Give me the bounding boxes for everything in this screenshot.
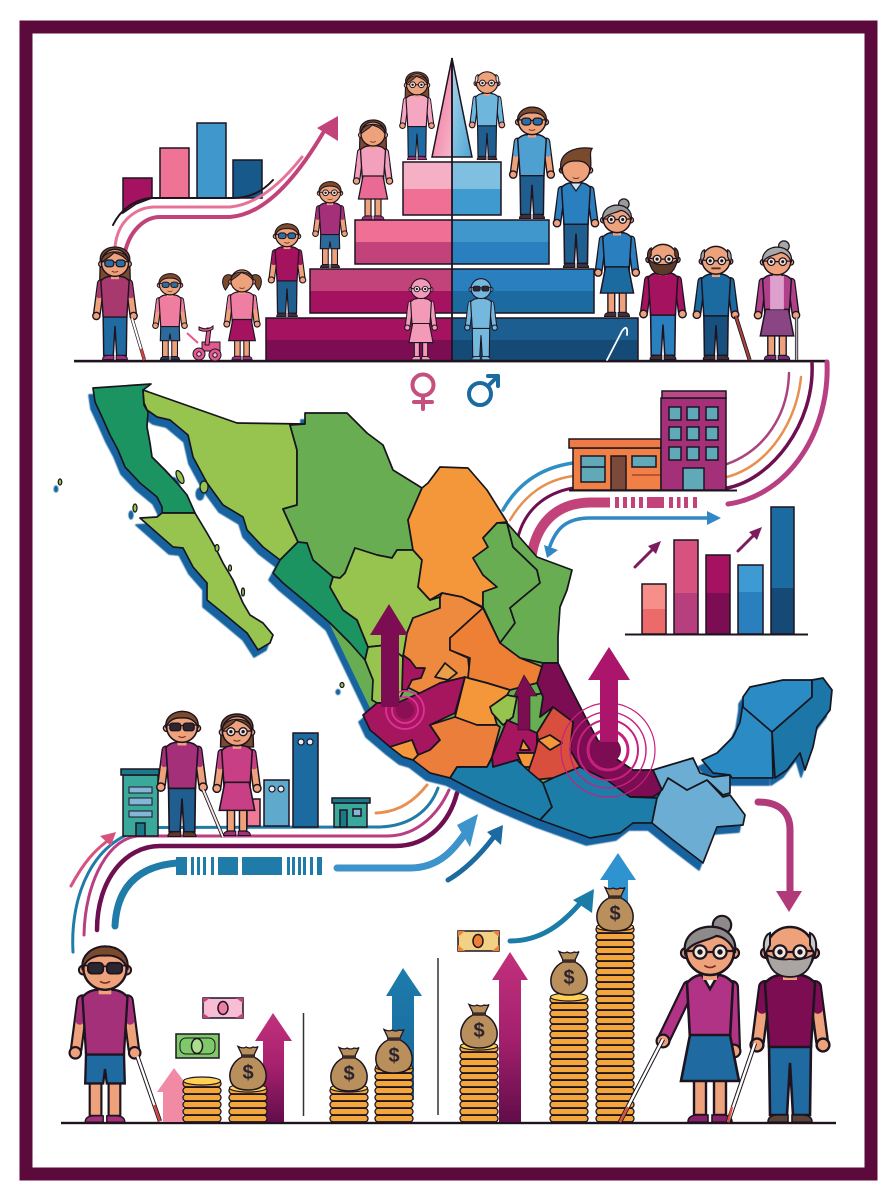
up arrow: blue: [386, 968, 422, 1100]
person: boy on pyramid step: [268, 224, 306, 317]
divider: [437, 958, 439, 1115]
target rings: west: [386, 691, 424, 729]
up arrow: magenta small group: [255, 1013, 292, 1122]
coin stack 3 with money bag: $: [343, 1063, 355, 1085]
state: Guanajuato: [455, 677, 510, 725]
state: Aguascalientes: [435, 663, 457, 680]
up arrow: light pink: [157, 1068, 192, 1122]
state: Morelos: [517, 753, 535, 767]
buildings: lower left skyline: [121, 733, 370, 836]
state: Estado de Mexico: [492, 720, 537, 767]
state: Queretaro: [490, 695, 517, 725]
state: San Luis Potosi: [450, 608, 543, 690]
barcode band: blue: [176, 857, 322, 875]
barcode band: pink: [615, 497, 697, 508]
state: Quintana Roo: [772, 678, 832, 778]
coin stack 7 with money bag: [595, 888, 635, 1122]
coin stack 2 with money bag: [228, 1046, 268, 1122]
coin stack 6 with money bag: $: [563, 967, 575, 989]
state: Hidalgo: [507, 693, 553, 733]
person: woman in pink dress: [213, 714, 261, 836]
person: woman on top step: [400, 72, 434, 160]
state: Campeche: [702, 703, 773, 778]
bar chart: right: [625, 507, 808, 634]
state: Oaxaca: [540, 767, 657, 838]
state: Yucatan: [743, 680, 812, 732]
up arrow: east: [588, 647, 630, 742]
person: boy in shorts: [313, 182, 347, 268]
person: grandfather with cane: [728, 927, 829, 1122]
person: girl with pigtails: [223, 270, 261, 360]
rising curved arrow: [115, 116, 338, 252]
state: Chihuahua: [283, 413, 422, 578]
person: older woman with cane: [754, 241, 800, 360]
map of Mexico: [58, 384, 832, 863]
state: Zacatecas: [403, 593, 483, 697]
person: man in sweater: [553, 148, 599, 268]
coin stack 1: [182, 1077, 222, 1122]
person: man with blue shades: [510, 107, 554, 219]
state: Colima: [390, 740, 418, 760]
up arrow: magenta: [492, 952, 528, 1122]
buildings: school and apartment block: [569, 391, 737, 490]
top baseline: [74, 360, 828, 362]
small pink arrow: [71, 832, 116, 886]
state: Guerrero: [450, 758, 552, 820]
person: boy with cane, large: [70, 946, 160, 1122]
state: Chiapas: [652, 778, 745, 863]
icon: white cane on pyramid: [607, 328, 627, 360]
population pyramid: [266, 58, 638, 361]
down arrow: [758, 802, 802, 912]
blue arrow toward map: [337, 814, 478, 868]
person: woman in pink skirt: [353, 120, 393, 220]
person: boy with glasses: [153, 274, 187, 360]
icon: green banknote: [176, 1034, 219, 1058]
state: Durango: [330, 548, 440, 657]
person: older man with cane: [693, 246, 750, 360]
coin stack 2 with money bag: $: [242, 1062, 254, 1084]
state: Tlaxcala: [538, 735, 562, 750]
icon: male symbol: [469, 376, 498, 405]
state: Jalisco north lobe: [402, 655, 425, 690]
top bar chart: [113, 123, 273, 225]
state: Michoacan: [413, 717, 500, 778]
state: Sonora: [143, 390, 305, 560]
coin stack 5 with money bag: $: [473, 1020, 485, 1042]
coin stack 6 with money bag: [549, 952, 589, 1122]
target rings: east: [561, 703, 655, 797]
coin stack 3 with money bag: [329, 1048, 369, 1122]
state: Baja California: [93, 384, 195, 513]
person: man with shades and cane: [157, 711, 223, 837]
divider: [302, 1013, 304, 1116]
dark blue arrow toward map: [448, 825, 503, 880]
up arrow: central: [514, 675, 537, 730]
up arrow: blue behind tall stack: [600, 853, 636, 910]
bottom baseline: [61, 1122, 836, 1124]
islands: [58, 469, 344, 688]
state: Baja California Sur: [140, 513, 273, 650]
icon: female symbol: [412, 374, 434, 409]
flow lines: right side to buildings: [503, 362, 827, 560]
person: woman with shades and cane: [93, 247, 144, 360]
icon: blue silhouette figure: [465, 279, 497, 360]
state: Puebla: [528, 707, 580, 780]
coin stack 5 with money bag: [459, 1004, 499, 1122]
icon: pink silhouette figure: [405, 279, 437, 360]
coin stack 4 with money bag: $: [388, 1045, 400, 1067]
person: older woman in blue: [595, 199, 639, 317]
curved blue arrow: [510, 889, 594, 941]
icon: tricycle: [187, 326, 221, 361]
state: Tamaulipas: [500, 523, 572, 663]
state: Nayarit: [365, 645, 408, 703]
coin stack 4 with money bag: [374, 1030, 414, 1122]
state: Jalisco: [363, 677, 465, 755]
up arrow: west: [370, 604, 408, 707]
state: Coahuila: [408, 467, 507, 607]
state: Nuevo Leon: [473, 523, 540, 643]
flow lines: lower left to map: [73, 785, 457, 952]
person: grandmother with cane: [620, 916, 740, 1122]
icon: orange banknote: [458, 931, 499, 951]
state: Mexico City: [520, 740, 530, 750]
coin stack 7 with money bag: $: [609, 903, 621, 925]
state: Veracruz: [537, 663, 663, 797]
person: bearded man: [640, 244, 686, 360]
state: Sinaloa: [273, 542, 368, 660]
icon: pink banknote: [203, 998, 243, 1018]
state: Tabasco: [653, 758, 730, 795]
person: bald man on top step: [469, 72, 505, 160]
double-headed blue arrow: [544, 511, 721, 558]
